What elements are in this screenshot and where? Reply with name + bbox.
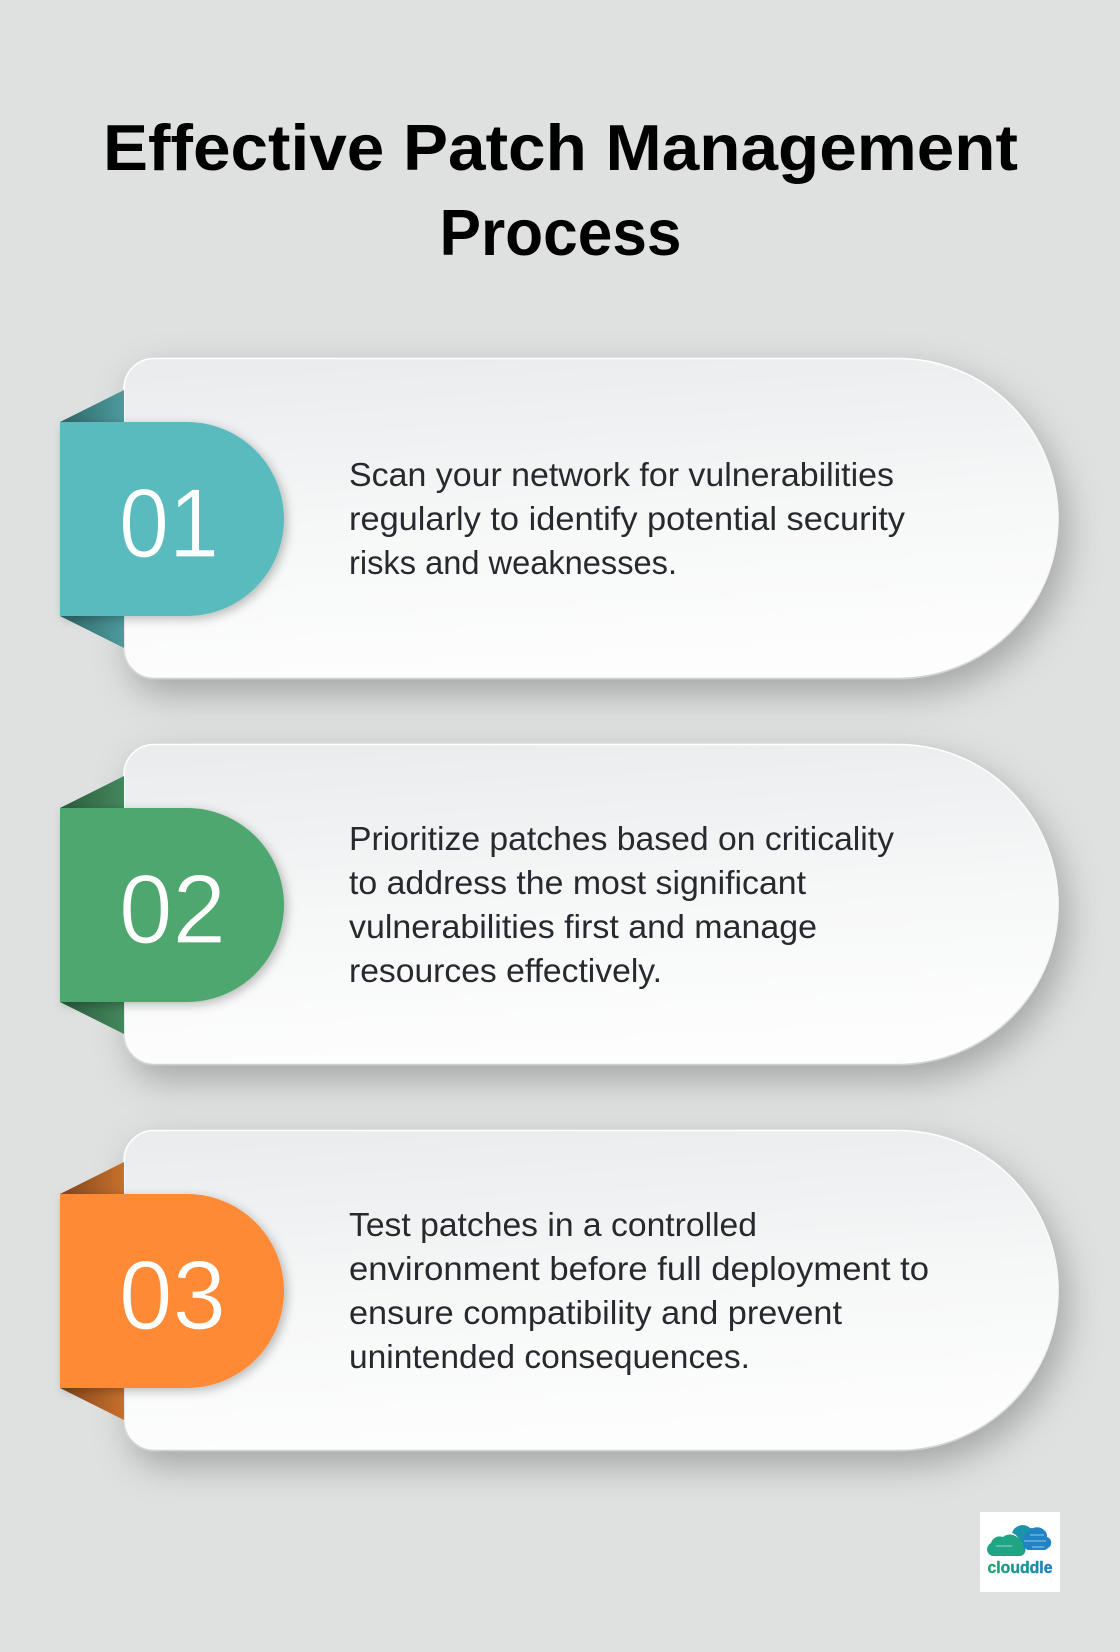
fold 01: [60, 390, 124, 648]
title: [103, 111, 1018, 269]
logo: clouddle: [980, 1512, 1060, 1592]
icon: clouds: [987, 1525, 1051, 1556]
panel: step 02: [60, 744, 1058, 1064]
text 03: ensure compatibility and prevent: [349, 1294, 842, 1331]
fold 02: [60, 776, 124, 1034]
text 01: regularly to identify potential security: [349, 500, 906, 537]
number 02: 02: [119, 854, 226, 964]
text 03: unintended consequences.: [349, 1338, 750, 1375]
title: Effective Patch Management: [103, 111, 1018, 184]
title: Process: [440, 196, 682, 269]
card 03: [124, 1130, 1058, 1450]
badge 02: [60, 808, 284, 1002]
panel: step 01: [60, 358, 1058, 678]
badge 03: [60, 1194, 284, 1388]
text 02: resources effectively.: [349, 952, 662, 989]
number 01: 01: [119, 468, 219, 578]
text 03: environment before full deployment to: [349, 1250, 929, 1287]
text 01: Scan your network for vulnerabilities: [349, 456, 894, 493]
text 02: Prioritize patches based on criticality: [349, 820, 894, 857]
fold 03: [60, 1162, 124, 1420]
text 02: vulnerabilities first and manage: [349, 908, 817, 945]
text 02: to address the most significant: [349, 864, 806, 901]
text 03: Test patches in a controlled: [349, 1206, 757, 1243]
text 02: [349, 820, 894, 989]
card 02: [124, 744, 1058, 1064]
card 01: [124, 358, 1058, 678]
text 03: [349, 1206, 929, 1375]
badge 01: [60, 422, 284, 616]
panel: step 03: [60, 1130, 1058, 1450]
number 03: 03: [119, 1240, 226, 1350]
text 01: risks and weaknesses.: [349, 544, 677, 581]
text 01: [349, 456, 906, 581]
wordmark: clouddle: [988, 1558, 1052, 1577]
